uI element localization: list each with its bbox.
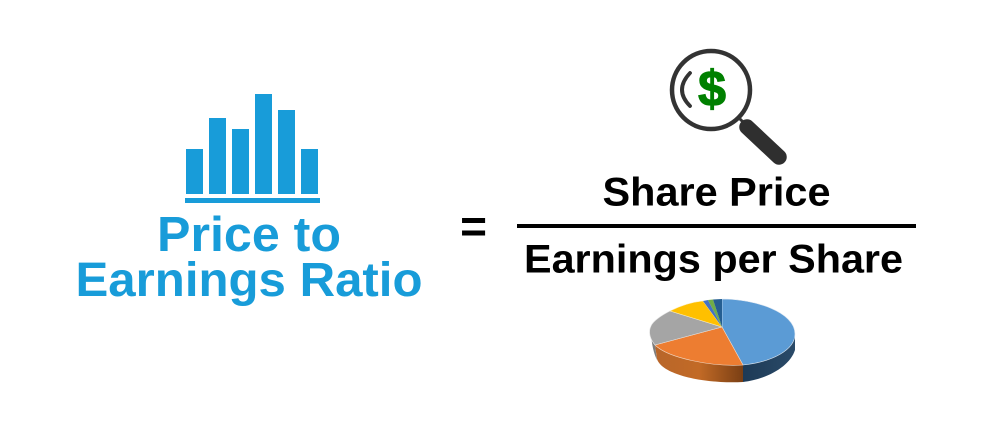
icon: bar chart: [185, 94, 320, 203]
formula numerator: Share Price: Share Price: [602, 170, 830, 214]
icon: magnifying glass with dollar sign: [672, 51, 779, 157]
fraction line: [517, 224, 916, 228]
equals sign: =: [460, 200, 487, 252]
icon: 3D pie chart: [650, 299, 795, 382]
icon: magnifying glass with dollar sign: $: [698, 61, 726, 117]
title: Price to Earnings Ratio: Earnings Ratio: [76, 254, 422, 307]
formula denominator: Earnings per Share: Earnings per Share: [524, 238, 903, 282]
title: Price to Earnings Ratio: Price to: [157, 208, 341, 262]
title: Price to Earnings Ratio: [76, 208, 422, 307]
